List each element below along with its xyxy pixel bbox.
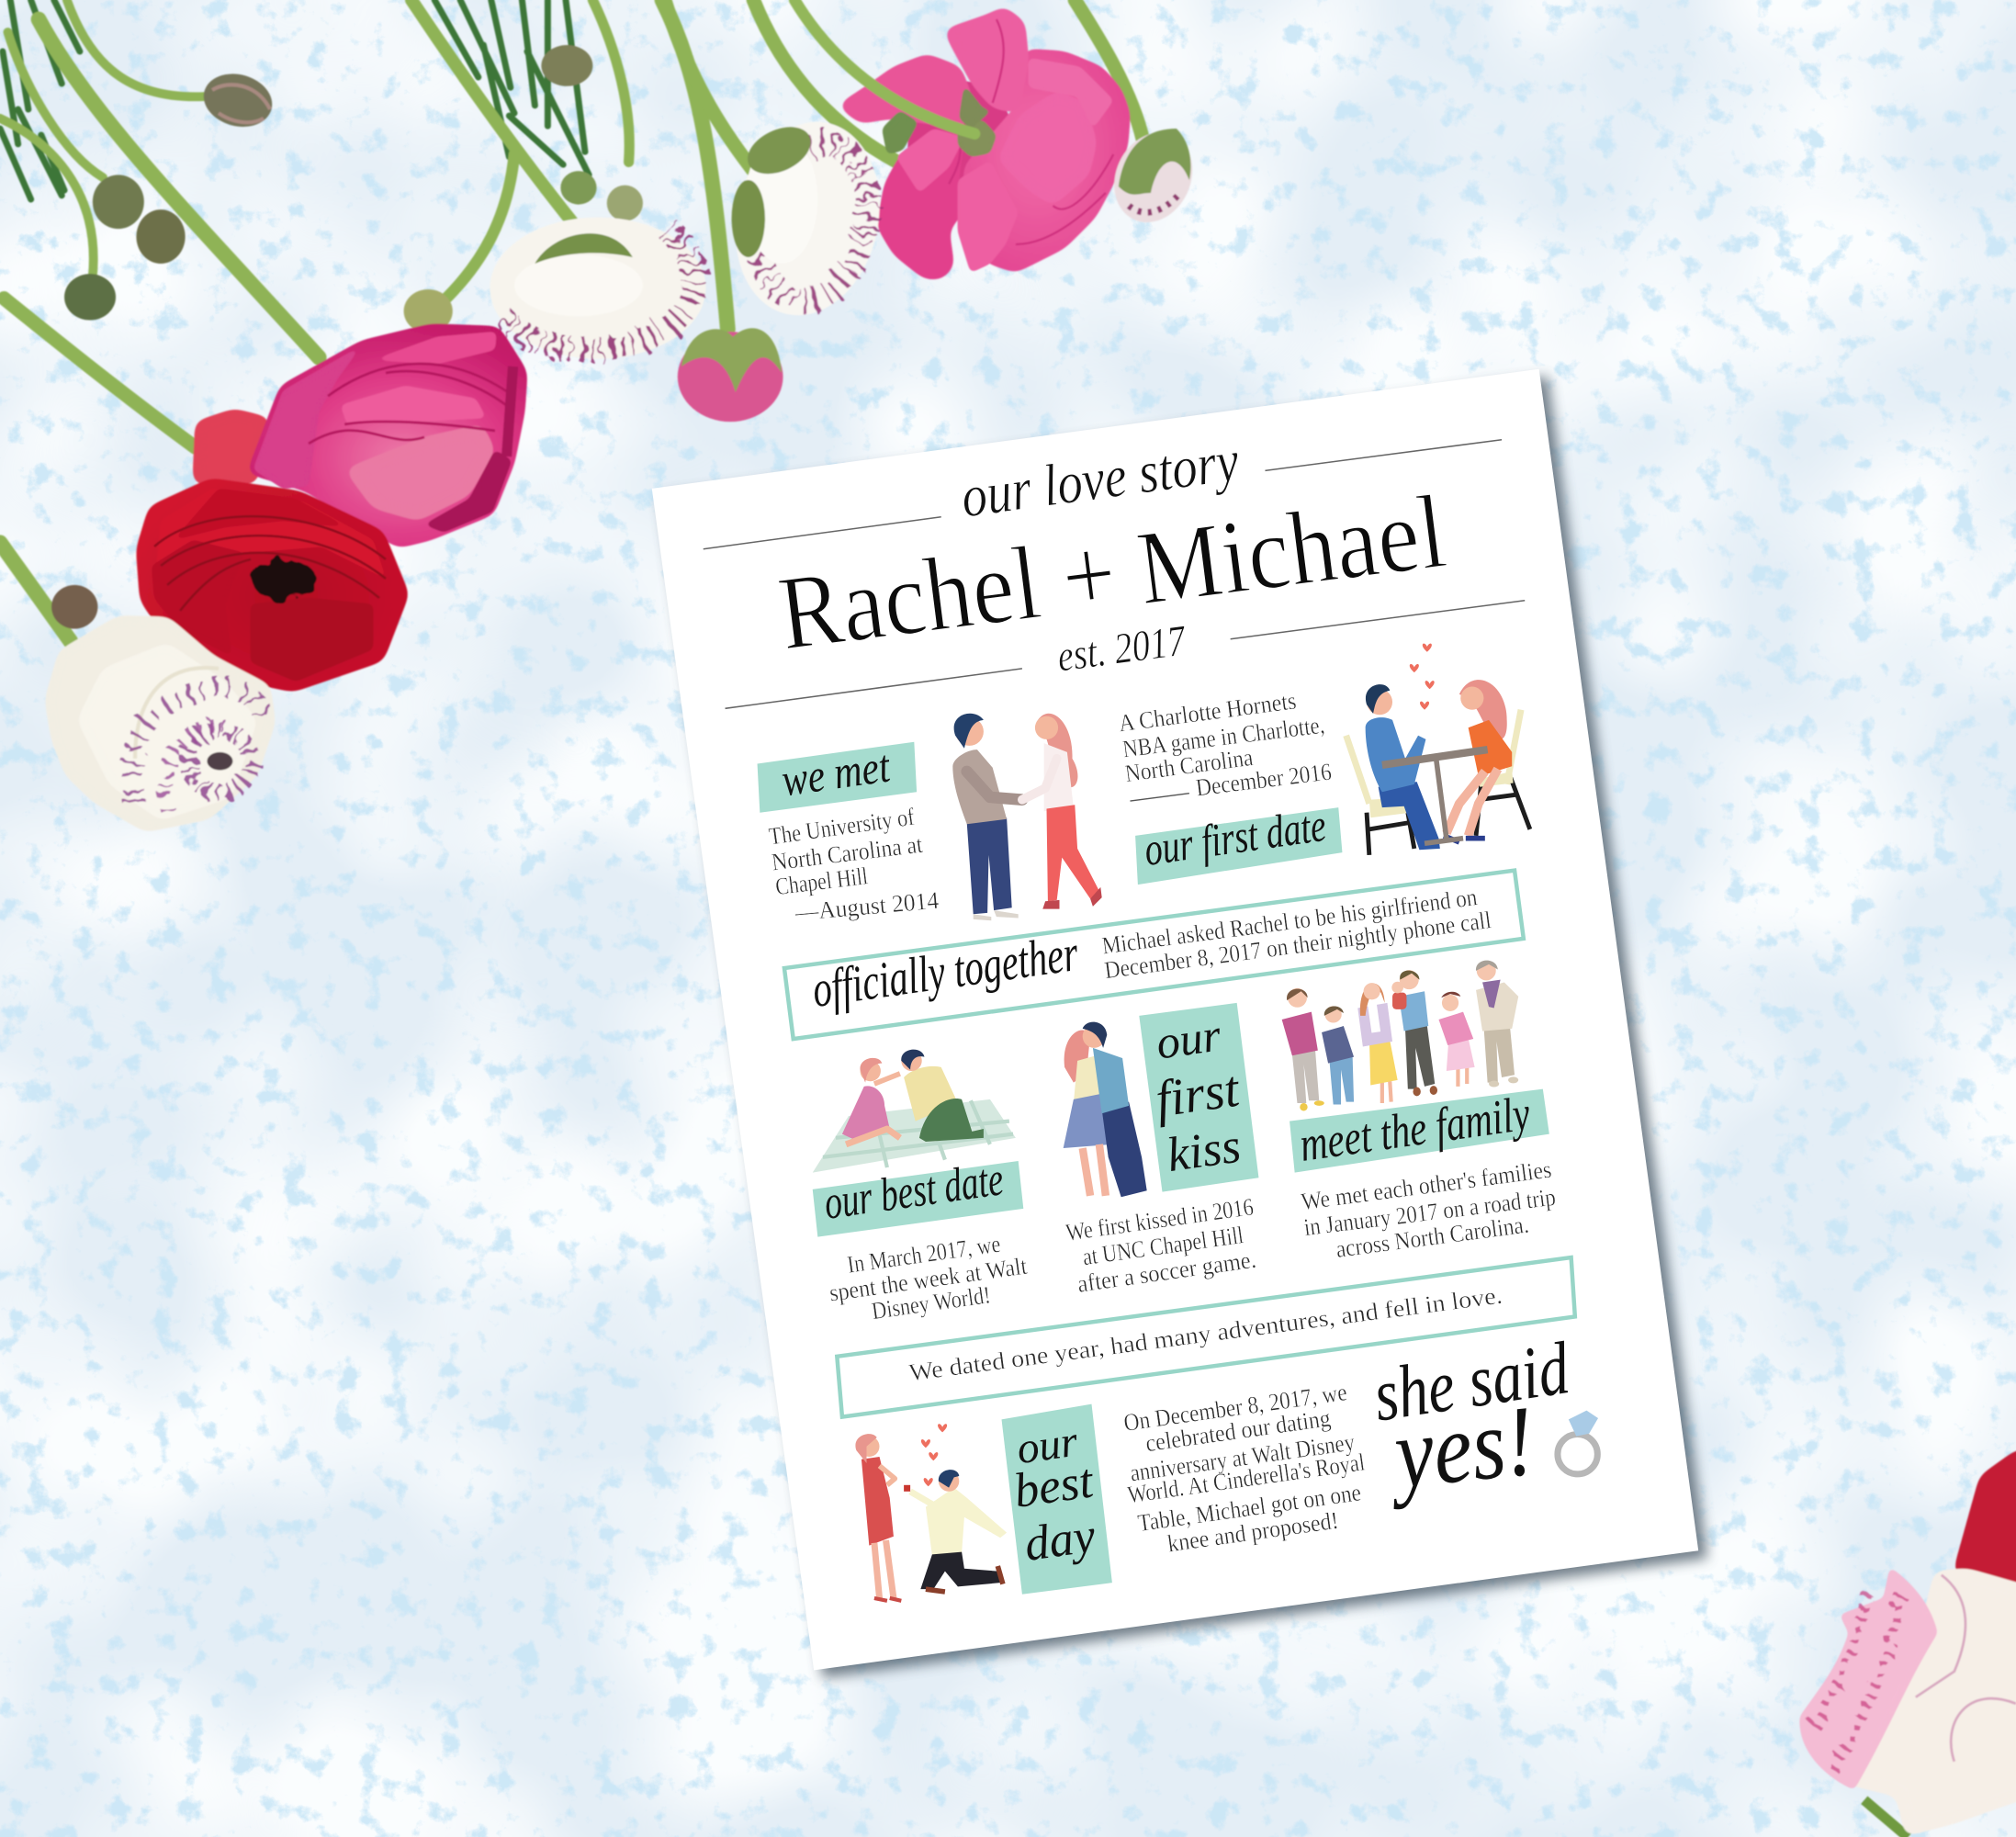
first date text bbox=[1117, 686, 1333, 801]
buds bbox=[51, 45, 643, 629]
panel: our best day bbox=[855, 1378, 1367, 1601]
first kiss text: after a soccer game. bbox=[1076, 1245, 1257, 1298]
panel: we met: we met bbox=[779, 739, 894, 806]
pink and white ranunculus bbox=[1800, 1567, 2016, 1836]
we met text: North Carolina at bbox=[770, 830, 925, 876]
officially together text: December 8, 2017 on their nightly phone call bbox=[1103, 906, 1492, 984]
poster drop shadow bbox=[661, 377, 1707, 1678]
best day text: On December 8, 2017, we bbox=[1122, 1378, 1348, 1437]
panel: our first kiss: our bbox=[1153, 1009, 1224, 1069]
best date text: Disney World! bbox=[870, 1280, 992, 1324]
illustration: picnic couple bbox=[813, 1050, 1016, 1173]
callout: we dated one year: We dated one year, had many adventures, and fell in love. bbox=[907, 1281, 1504, 1386]
we met text bbox=[767, 803, 940, 926]
flower arrangement: bottom right blooms bbox=[1800, 1447, 2016, 1837]
panel: our first date: our first date bbox=[1141, 799, 1329, 875]
subtitle: our love story bbox=[957, 427, 1243, 530]
poster sheet bbox=[652, 369, 1698, 1670]
best day text: World. At Cinderella's Royal bbox=[1126, 1448, 1367, 1508]
poster: our love story timeline bbox=[652, 369, 1707, 1678]
pink ranunculus bbox=[837, 6, 1130, 279]
panel: our best day: our bbox=[1014, 1418, 1081, 1473]
label: we met bbox=[758, 742, 917, 813]
established date: est. 2017 bbox=[1054, 617, 1189, 682]
best date text bbox=[828, 1230, 1030, 1324]
panel: our first kiss: kiss bbox=[1164, 1119, 1244, 1182]
meet the family text: across North Carolina. bbox=[1335, 1211, 1530, 1263]
person 4 bbox=[1391, 970, 1437, 1096]
person 5 bbox=[1438, 992, 1475, 1087]
flower arrangement: top left stems and blooms bbox=[0, 0, 1207, 832]
best day text: Table, Michael got on one bbox=[1136, 1478, 1363, 1537]
first date text: December 2016 bbox=[1194, 758, 1333, 801]
white purple flower, right bbox=[718, 108, 897, 329]
white purple flower, lower left bbox=[45, 616, 276, 832]
panel: our best date: our best date bbox=[821, 1153, 1007, 1230]
callout: we dated one year bbox=[837, 1257, 1575, 1417]
panel: our first kiss: first bbox=[1153, 1060, 1244, 1129]
panel: our first date bbox=[1117, 644, 1530, 885]
stems bbox=[0, 0, 1143, 642]
bud with white pink petals, top right bbox=[1100, 119, 1207, 235]
stems over pink flower bbox=[794, 0, 974, 134]
callout: officially together: officially together bbox=[809, 925, 1082, 1019]
foliage bbox=[0, 0, 589, 199]
first date text: North Carolina bbox=[1123, 743, 1255, 787]
best day text: celebrated our dating bbox=[1143, 1403, 1333, 1457]
title: Rachel + Michael bbox=[772, 472, 1452, 672]
meet the family text: We met each other's families bbox=[1300, 1155, 1553, 1215]
label: our first date bbox=[1135, 807, 1342, 885]
panel: our best day: best bbox=[1010, 1453, 1098, 1518]
best date text: In March 2017, we bbox=[846, 1230, 1002, 1279]
person 2 bbox=[1322, 1006, 1354, 1104]
illustration: couple holding hands bbox=[952, 714, 1102, 920]
sepals bbox=[958, 119, 997, 157]
meet the family text bbox=[1300, 1155, 1557, 1263]
illustration: couple at table bbox=[1346, 644, 1530, 855]
panel: meet the family: meet the family bbox=[1297, 1086, 1534, 1172]
best date text: spent the week at Walt bbox=[828, 1252, 1030, 1307]
callout: officially together bbox=[784, 871, 1524, 1039]
illustration: proposal bbox=[855, 1424, 1007, 1601]
we met text: The University of bbox=[767, 803, 917, 851]
panel: our best date bbox=[813, 1050, 1030, 1324]
first kiss text bbox=[1064, 1192, 1257, 1298]
red bloom bbox=[1954, 1447, 2016, 1646]
illustration: family group bbox=[1282, 961, 1518, 1110]
panel: our first kiss bbox=[1064, 1003, 1258, 1298]
best day text: knee and proposed! bbox=[1166, 1506, 1340, 1558]
panel: our best day: day bbox=[1021, 1508, 1098, 1572]
first date text: NBA game in Charlotte, bbox=[1121, 711, 1326, 762]
callout: she said yes bbox=[1368, 1326, 1598, 1510]
label: our best day bbox=[1002, 1404, 1112, 1595]
person 6 bbox=[1476, 961, 1518, 1088]
person 1 bbox=[1282, 988, 1324, 1110]
first kiss text: at UNC Chapel Hill bbox=[1081, 1221, 1245, 1270]
magenta rose bbox=[193, 324, 527, 547]
meet the family text: in January 2017 on a road trip bbox=[1302, 1183, 1557, 1241]
pink bud bbox=[678, 328, 783, 422]
red ranunculus bbox=[136, 479, 409, 692]
panel: we met bbox=[758, 714, 1102, 926]
callout: she said yes: yes! bbox=[1381, 1384, 1539, 1510]
illustration: kissing couple bbox=[1064, 1022, 1147, 1197]
officially together text: Michael asked Rachel to be his girlfriend on bbox=[1100, 883, 1479, 960]
stem bbox=[1864, 1800, 1908, 1837]
white purple flower, middle bbox=[490, 218, 706, 359]
we met text: —August 2014 bbox=[793, 886, 940, 926]
label: meet the family bbox=[1290, 1089, 1549, 1173]
callout: she said yes: she said bbox=[1368, 1326, 1574, 1437]
person 3 bbox=[1357, 983, 1398, 1103]
first date text: A Charlotte Hornets bbox=[1117, 686, 1298, 737]
header rules bbox=[704, 440, 1525, 708]
panel: meet the family bbox=[1282, 961, 1557, 1263]
we met text: Chapel Hill bbox=[774, 862, 869, 900]
best day text: anniversary at Walt Disney bbox=[1129, 1427, 1357, 1487]
label: our best date bbox=[813, 1161, 1023, 1237]
first kiss text: We first kissed in 2016 bbox=[1064, 1192, 1255, 1246]
best day text bbox=[1122, 1378, 1367, 1558]
icon: diamond ring bbox=[1558, 1411, 1598, 1474]
label: our first kiss bbox=[1139, 1003, 1258, 1192]
